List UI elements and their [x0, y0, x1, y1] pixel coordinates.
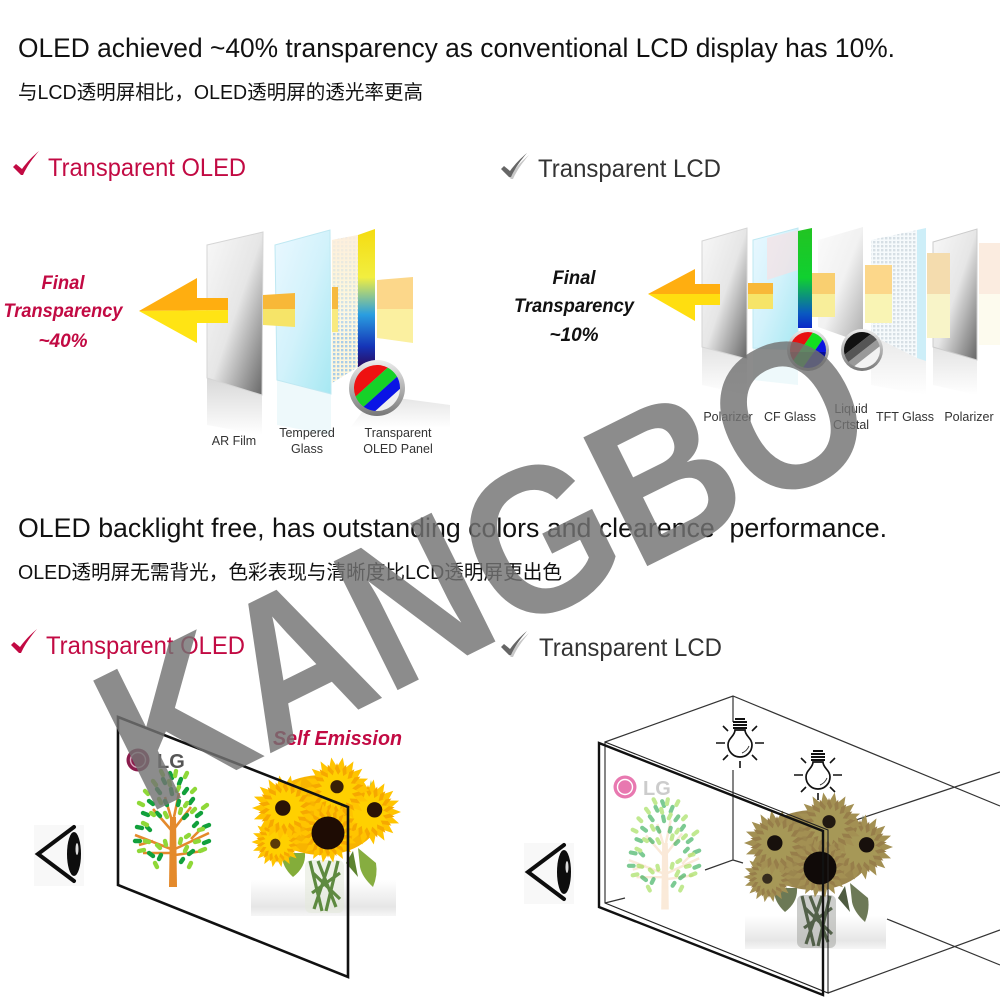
icon: bulb right [794, 751, 842, 800]
callout: final transparency 10%: Final [552, 268, 596, 289]
illustration: pale tree [629, 799, 699, 910]
labels: OLED layers [212, 426, 433, 456]
chinese subtitle: backlight: OLED透明屏无需背光，色彩表现与清晰度比LCD透明屏更出色 [18, 561, 562, 584]
icon: bulb left [716, 719, 764, 768]
chinese subtitle: transparency: 与LCD透明屏相比，OLED透明屏的透光率更高 [18, 81, 423, 104]
watermark: KANGBO: KANGBO [62, 279, 906, 855]
labels: LCD layers: CF Glass [764, 410, 816, 424]
light blocks [748, 243, 1000, 345]
callout: final transparency 40%: ~40% [38, 331, 88, 352]
icon: RGB circle [787, 329, 829, 371]
layer: green strip [798, 228, 812, 328]
arrow: left [139, 278, 228, 343]
icon: RGB stripes circle [349, 360, 405, 416]
illustration: dull sunflowers [744, 793, 893, 949]
icon: eye [524, 843, 574, 904]
callout: final transparency 10%: Transparency [514, 296, 635, 317]
layer: TFT glass [871, 228, 926, 361]
diagram: OLED layers [139, 229, 450, 435]
layer: CF glass [753, 228, 798, 350]
frame: transparent screen [118, 717, 348, 977]
heading: Transparent LCD bottom: Transparent LCD [539, 634, 722, 662]
icon: grey circle [841, 329, 883, 371]
labels: OLED layers: Glass [291, 442, 323, 456]
light blocks [263, 277, 413, 343]
callout: final transparency 40%: Final [42, 273, 85, 294]
title: backlight free: OLED backlight free, has outstanding colors and clearence performance. [18, 513, 887, 543]
box: back wire frame [605, 696, 1000, 993]
diagram: OLED self emission [34, 717, 402, 977]
icon: eye [34, 825, 84, 886]
callout: final transparency 40%: Transparency [4, 301, 124, 322]
callout: final transparency 10% [514, 268, 635, 346]
layer: back polarizer [933, 229, 977, 360]
illustration: sunflowers [251, 758, 401, 916]
layer: colour strip [358, 229, 375, 367]
labels: OLED layers: OLED Panel [363, 442, 433, 456]
labels: OLED layers: Tempered [279, 426, 335, 440]
logo: LG pale [614, 776, 671, 800]
arrow: left [648, 269, 720, 321]
title: OLED transparency: OLED achieved ~40% transparency as conventional LCD display has 10%. [18, 33, 895, 63]
labels: LCD layers [703, 402, 994, 432]
illustration: tree [135, 771, 209, 887]
labels: OLED layers: AR Film [212, 434, 256, 448]
logo: LG pale: LG [643, 778, 671, 800]
layer: tempered glass [275, 230, 331, 394]
label: Self Emission: Self Emission [273, 728, 402, 750]
labels: LCD layers: Liquid [834, 402, 868, 416]
heading: Transparent OLED top: Transparent OLED [48, 154, 246, 182]
logo: LG: LG [157, 751, 185, 773]
heading: Transparent LCD top: Transparent LCD [538, 155, 721, 183]
labels: LCD layers: Crtstal [833, 418, 869, 432]
diagram: LCD backlight box [524, 696, 1000, 995]
layer: polarizer [702, 228, 747, 359]
layer: dotted panel [332, 235, 358, 383]
layer: liquid crystal [818, 227, 863, 343]
diagram: LCD layers [648, 227, 1000, 395]
logo: LG [126, 748, 185, 773]
callout: final transparency 10%: ~10% [549, 325, 599, 346]
labels: LCD layers: TFT Glass [876, 410, 934, 424]
layer: AR film [207, 232, 263, 395]
labels: LCD layers: Polarizer [703, 410, 753, 424]
callout: final transparency 40% [4, 273, 124, 352]
frame: LCD panel [599, 742, 828, 995]
labels: OLED layers: Transparent [365, 426, 432, 440]
heading: Transparent OLED bottom: Transparent OLED [46, 632, 245, 660]
labels: LCD layers: Polarizer [944, 410, 994, 424]
